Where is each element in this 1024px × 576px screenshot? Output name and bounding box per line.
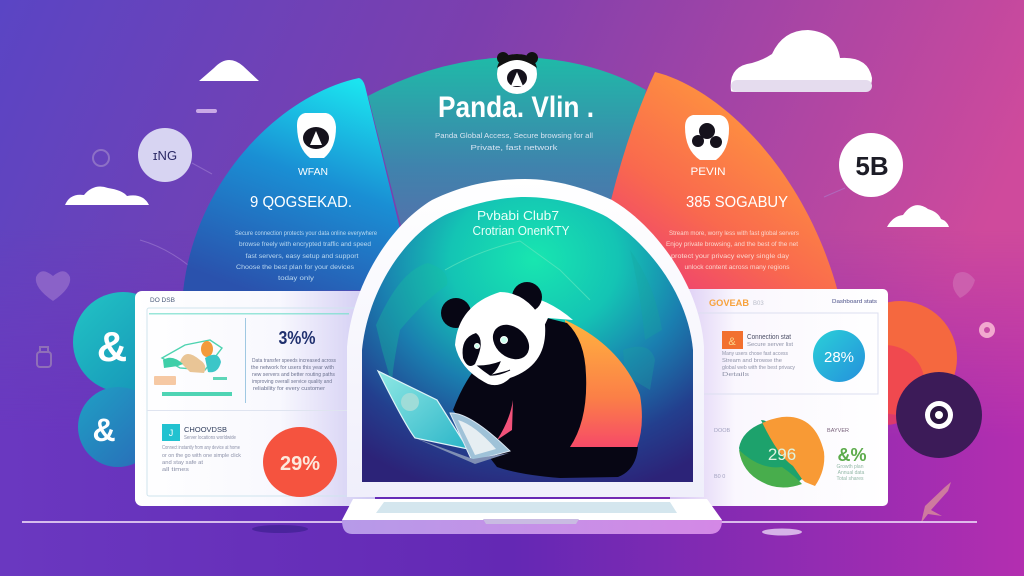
circle: blue lower left [78, 387, 158, 467]
icon: panda head top [497, 52, 538, 94]
circle: right white badge [839, 133, 903, 197]
laptop lip [342, 520, 722, 534]
chart label right: BAYVER [827, 428, 849, 434]
panda eyes [474, 336, 508, 348]
cloud: right [887, 205, 949, 227]
panel: right dashboard card [670, 289, 888, 506]
panel: orange right segment [600, 72, 838, 292]
icon: panda badge right [685, 115, 729, 160]
label: card header right: Dashboard stats [832, 299, 877, 305]
text block: legend: Growth plan [837, 464, 864, 470]
inner frame [147, 308, 365, 496]
cloud: top right [731, 30, 872, 92]
chart label left: B0 0 [714, 474, 725, 480]
label: card header: DO DSB [150, 297, 175, 304]
panda [441, 282, 642, 478]
icon: glyph: & [92, 412, 116, 448]
label: left segment name: WFAN [298, 167, 328, 178]
heading: left segment: 9 QOGSEKAD. [250, 194, 352, 211]
icon: orange square: & [728, 336, 736, 348]
laptop frame [347, 179, 704, 497]
chart label left: DOOB [714, 428, 731, 434]
icon: rocket [921, 482, 951, 523]
text block: card lower: Connect instantly from any device at home [162, 445, 240, 451]
floor glows [252, 525, 802, 536]
text block: right segment: protect your privacy every single day [671, 253, 790, 260]
icon: faint lock [37, 347, 51, 367]
cloud: left [65, 187, 149, 205]
text block: legend: Annual data [838, 470, 865, 476]
text block: left segment: Choose the best plan for your devices [236, 264, 355, 271]
icon: small dash [196, 109, 217, 113]
circle: teal upper left [73, 292, 173, 392]
circle: dark badge [896, 372, 982, 458]
base line [22, 521, 977, 523]
icon: teal square [162, 424, 180, 441]
icon: faint badge [93, 150, 109, 166]
text block: left segment: browse freely with encrypted traffic and speed [239, 241, 371, 248]
text block: card right column: new servers and better routing paths [252, 372, 335, 378]
cloud: top left [199, 60, 259, 81]
text block: card right column [251, 358, 336, 392]
subtitle: Panda Global Access, Secure browsing for all [435, 133, 593, 140]
laptop screen [362, 197, 693, 482]
stat: 3%: 3%% [278, 328, 316, 348]
text block: Stream and browse the [722, 358, 782, 364]
icon: panda badge left [297, 113, 336, 158]
tablet [378, 371, 510, 464]
stat circle: red [263, 427, 337, 497]
laptop [342, 179, 722, 534]
panel: blue left segment [183, 78, 415, 292]
subheading: CHOOVDSB [184, 425, 227, 434]
text block: card lower: all times [162, 467, 190, 473]
text block: right segment [666, 230, 800, 271]
label: card header tag: B03 [753, 301, 764, 307]
text block: Details [722, 372, 750, 378]
subheading: Connection stat [747, 334, 791, 341]
circle: orange behind right panel [843, 301, 957, 425]
stat circle: blue [813, 330, 865, 382]
map silhouettes [376, 241, 662, 390]
inner frame [690, 313, 878, 394]
text block: global web with the best privacy [722, 365, 796, 371]
text block: legend [837, 464, 865, 482]
heading: card: GOVEAB [709, 298, 750, 308]
text block: Secure server list [747, 342, 794, 348]
panda white shoulder [515, 293, 573, 335]
icon: glyph: & [97, 323, 127, 370]
panda orange back [565, 320, 642, 450]
icon: teal square: J [169, 428, 173, 438]
text block: card lower: and stay safe at [162, 460, 204, 466]
text block: card lower: Server locations worldwide [184, 435, 236, 441]
badge number: 5B [855, 151, 889, 181]
title: Panda. Vlin . [438, 91, 594, 124]
panel: left dashboard card [135, 291, 375, 506]
panel: teal centre segment [368, 52, 646, 300]
icon: green percent glyph: &% [837, 445, 867, 465]
stat circle: blue: 28% [824, 349, 854, 366]
text block [722, 342, 796, 378]
label: right segment name: PEVIN [690, 166, 726, 178]
icon: faint heart right [953, 272, 975, 298]
text block: left segment: Secure connection protects your data online everywhere [235, 230, 377, 237]
chart label left [714, 428, 731, 480]
text block: right segment: Enjoy private browsing, and the best of the net [666, 241, 798, 248]
subtitle: Private, fast network [470, 145, 558, 152]
stat circle: red: 29% [280, 453, 320, 475]
badge text: ɪNG [153, 148, 177, 163]
text block: card lower: or on the go with one simple click [162, 453, 242, 459]
text block: card lower [162, 435, 242, 473]
text block: right segment: Stream more, worry less with fast global servers [669, 230, 800, 237]
screen title [472, 208, 570, 238]
icon: faint heart [36, 271, 70, 301]
screen title: Crotrian OnenKTY [472, 223, 570, 238]
laptop keyboard [376, 502, 677, 513]
text block: left segment [235, 230, 377, 282]
illustration: globe map [154, 340, 232, 396]
text block: legend: Total shares [837, 476, 864, 482]
text block: Many users chose fast access [722, 351, 788, 357]
circle: left lavender badge [138, 128, 192, 182]
panda head [455, 292, 545, 385]
icon: orange square [722, 331, 743, 349]
text block: card right column: reliability for every customer [253, 386, 325, 392]
panda ears [441, 298, 471, 328]
text block: card right column: improving overall service quality and [252, 379, 332, 385]
screen title: Pvbabi Club7 [477, 208, 559, 223]
icon: pink dot [979, 322, 995, 338]
text block: card right column: Data transfer speeds increased across [252, 358, 336, 364]
panda nose [478, 362, 510, 375]
panda body [453, 318, 638, 478]
laptop notch [483, 519, 579, 524]
text block: right segment: unlock content across many regions [684, 264, 790, 271]
text block: card right column: the network for users this year with [251, 365, 334, 371]
panda eye patches [463, 318, 536, 366]
subtitle [435, 133, 593, 152]
chart: pie [739, 417, 824, 488]
text block: left segment: today only [278, 275, 315, 282]
text block: left segment: fast servers, easy setup and support [246, 253, 359, 260]
heading: right segment: 385 SOGABUY [686, 194, 788, 211]
laptop base [342, 499, 722, 520]
chart value: 296 [768, 445, 796, 464]
